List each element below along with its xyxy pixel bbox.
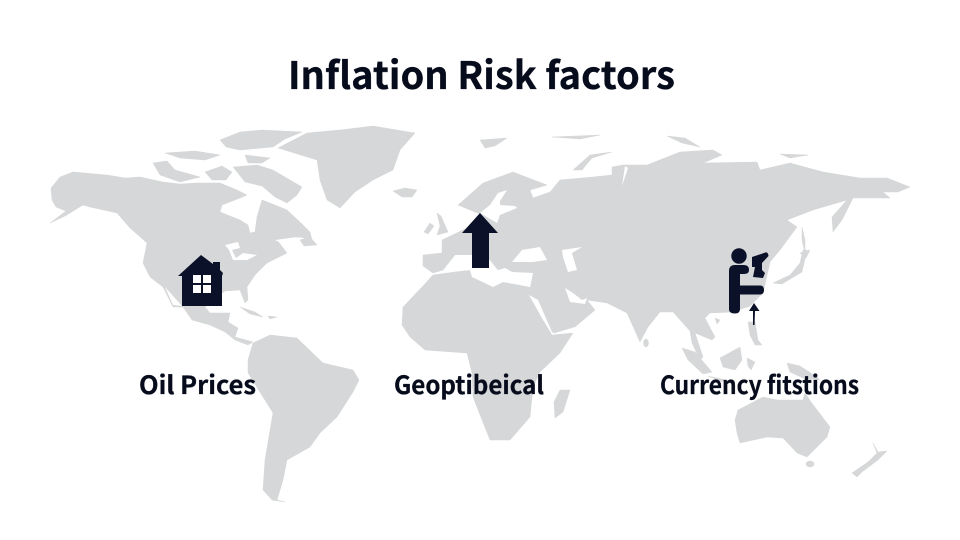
- Great Lakes: [225, 242, 257, 260]
- Iceland: [393, 188, 417, 197]
- icon: figure with small arrow: [729, 248, 768, 325]
- Gulf of Ob: [622, 166, 628, 186]
- British Isles: [437, 213, 448, 235]
- label: Currency fitstions: Currency fitstions: [660, 366, 859, 402]
- South-East Asia: [682, 348, 712, 374]
- New Zealand: [852, 443, 887, 477]
- Persian gulf: [565, 288, 587, 304]
- label: Geoptibeical: Geoptibeical: [394, 366, 544, 402]
- Gulf of California: [165, 287, 182, 306]
- world map background: [50, 126, 910, 502]
- North America: [50, 172, 312, 345]
- Gulf of Aden: [555, 327, 575, 333]
- icon: house: [178, 255, 223, 306]
- South America: [248, 335, 359, 502]
- Gulf of St Lawrence: [275, 237, 297, 253]
- label: Oil Prices: Oil Prices: [139, 366, 256, 402]
- Arctic Russia islands: [573, 152, 612, 170]
- Madagascar: [554, 390, 570, 418]
- Australia: [735, 393, 830, 457]
- Baltic sea: [480, 190, 517, 223]
- Arctic islands: [233, 165, 302, 203]
- Tasmania: [806, 461, 814, 467]
- Mediterranean: [445, 255, 472, 272]
- title: Inflation Risk factors: [288, 45, 675, 100]
- Eurasia: [423, 150, 910, 360]
- Black sea: [512, 247, 547, 262]
- Caribbean: [240, 307, 263, 317]
- Sri Lanka: [644, 339, 648, 347]
- icon: up arrow: [462, 213, 498, 268]
- Japan: [773, 250, 807, 284]
- Newfoundland: [300, 237, 317, 246]
- Africa: [402, 270, 573, 440]
- Caspian sea: [562, 247, 582, 272]
- Greenland: [278, 126, 415, 208]
- Red sea: [529, 295, 552, 332]
- inland seas: [165, 166, 628, 333]
